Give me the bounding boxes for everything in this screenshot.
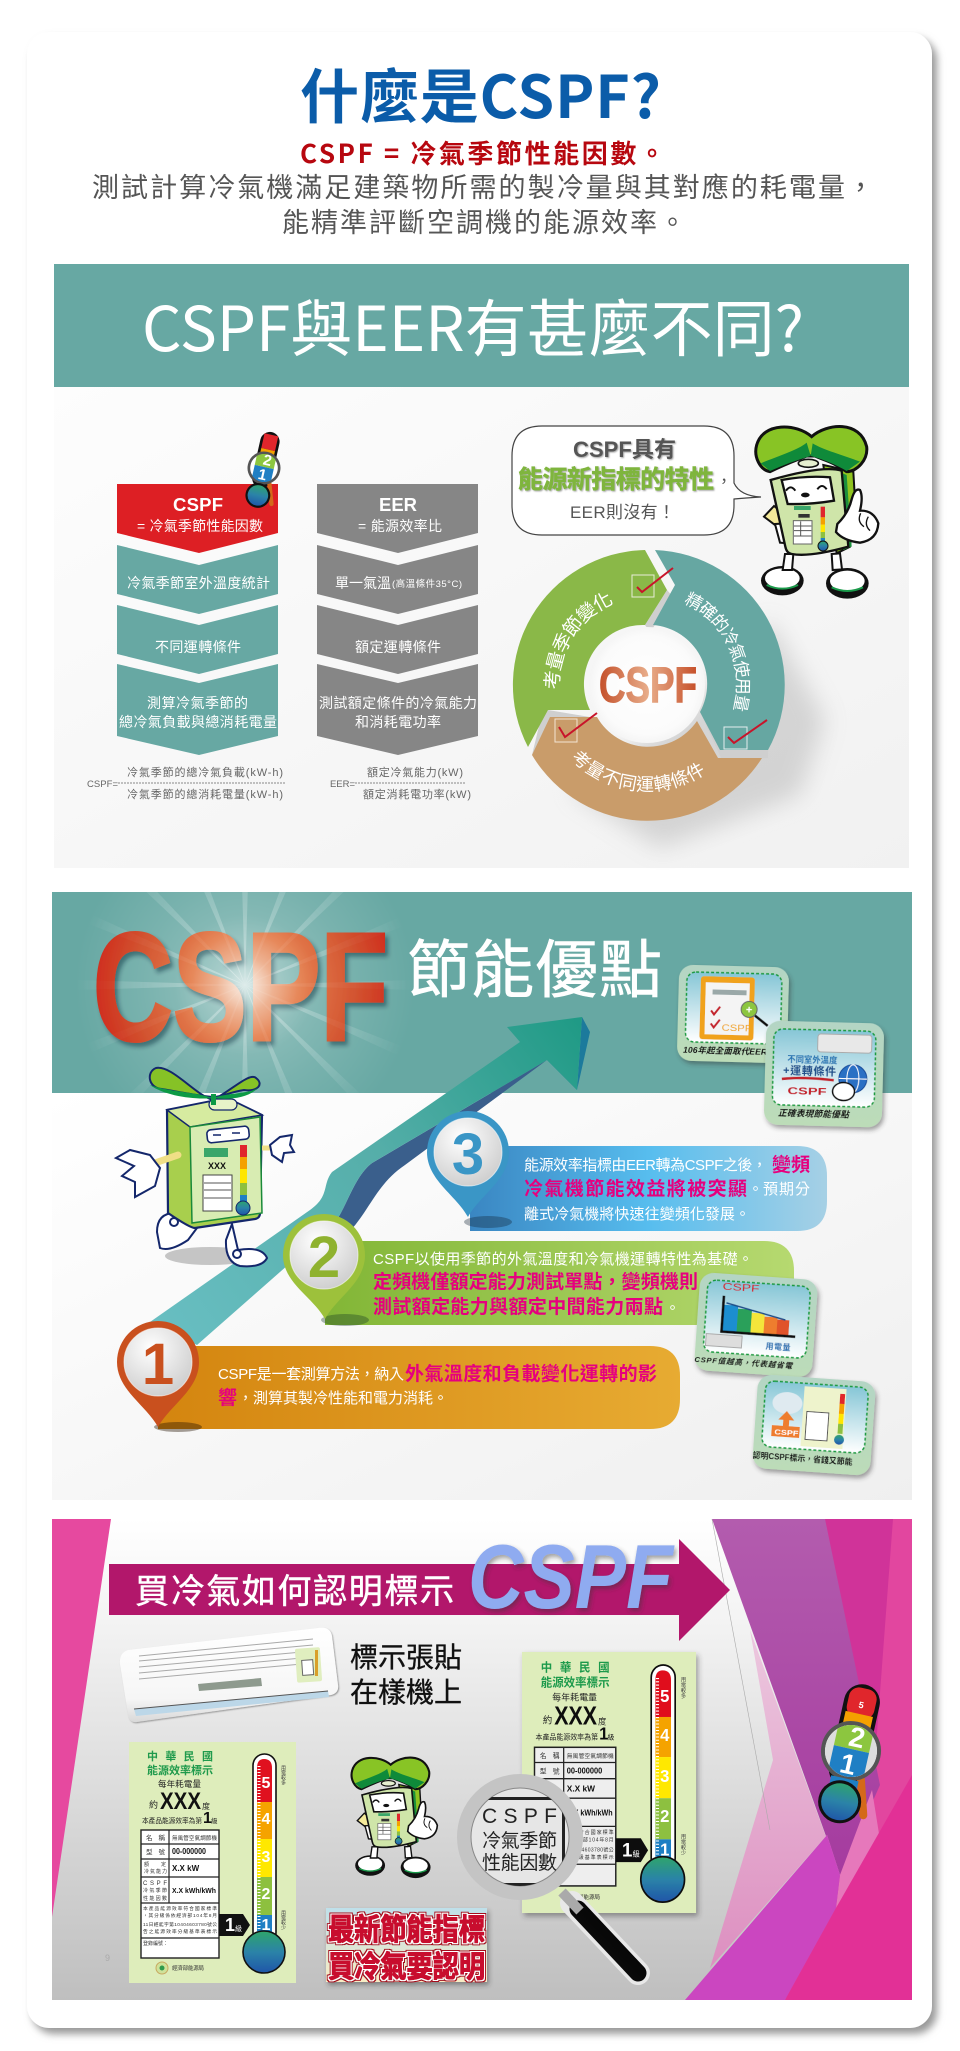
center disc <box>589 627 705 743</box>
pin 3 <box>427 1111 512 1228</box>
description text: 測試計算冷氣機滿足建築物所需的製冷量與其對應的耗電量， <box>92 166 874 205</box>
mascot: propeller leaves: XXX <box>208 1161 226 1171</box>
EER chevron text: 單一氣溫 <box>335 575 391 591</box>
energy label: left: 告之能源效率分級基準表標示 <box>143 1928 217 1935</box>
bar 1: ，測算其製冷性能和電力消耗。 <box>238 1390 448 1407</box>
panel background <box>52 1093 912 1500</box>
bar 2: CSPF以使用季節的外氣溫度和冷氣機運轉特性為基礎。 <box>373 1250 753 1268</box>
badge: higher CSPF saves power <box>694 1272 818 1378</box>
EER formula: EER= <box>330 779 355 790</box>
EER chevron text <box>319 494 477 730</box>
energy label: left <box>129 1742 296 1983</box>
green segment <box>513 550 667 747</box>
badge: recognise CSPF label <box>752 1374 876 1476</box>
energy label: left: 用電較多 <box>280 1765 286 1786</box>
energy label: right: 用電較少 <box>680 1834 686 1856</box>
speech bubble <box>512 426 761 535</box>
bar 1: 響 <box>218 1386 237 1409</box>
badge: accurate energy saving: 正確表現節能優點 <box>778 1108 850 1120</box>
energy label: left: 1 <box>203 1810 212 1827</box>
energy label: left: 級 <box>211 1816 218 1825</box>
bar 3 <box>470 1146 827 1231</box>
bar 1: CSPF是一套測算方法，納入 <box>218 1366 404 1383</box>
energy label: right: 每年耗電量 <box>552 1692 597 1703</box>
energy label: right: 級 <box>632 1849 640 1859</box>
energy label: left: 5 <box>262 1775 271 1792</box>
icon: thermometer with magnifier: 1 <box>256 466 268 484</box>
badge: replaces EER <box>677 965 789 1063</box>
energy label: left: 經濟部能源局 <box>172 1964 204 1972</box>
energy label: left: 用電較少 <box>280 1910 286 1930</box>
EER chevron text: EER <box>379 494 417 515</box>
donut shadow <box>570 620 825 848</box>
banner title: 買冷氣如何認明標示 <box>135 1573 454 1611</box>
badge: replaces EER: CSPF <box>722 1023 752 1034</box>
energy label: left: 無風管空氣調節機 <box>172 1834 217 1842</box>
tan ring text: 考量不同運轉條件 <box>574 750 704 792</box>
magnifier: 性能因數 <box>482 1852 557 1874</box>
donut diagram <box>512 550 829 852</box>
CSPF chevron text: 測算冷氣季節的 <box>147 695 248 711</box>
energy label: right: 約 <box>543 1714 552 1727</box>
bar 3: 。 <box>748 1181 763 1198</box>
energy label: left: 2 <box>262 1886 271 1903</box>
CSPF formula <box>87 765 286 801</box>
energy label: right: 用電較多 <box>680 1677 686 1700</box>
sticker caption: 標示張貼 <box>350 1642 462 1673</box>
handle <box>572 1903 638 1973</box>
air conditioner <box>120 1628 338 1722</box>
energy label: left: 登錄編號： <box>143 1940 168 1947</box>
left pink shape <box>52 1519 111 1917</box>
energy label: right: 中 華 民 國 <box>541 1660 610 1675</box>
heading band <box>54 264 909 387</box>
bar 2 <box>325 1241 794 1325</box>
energy label: left: 本產品能源效率為第 <box>142 1816 202 1825</box>
sticker caption <box>350 1642 462 1708</box>
bar 1 <box>158 1346 680 1429</box>
energy label: left: 名 稱 <box>146 1833 166 1842</box>
badge: accurate energy saving: 不同室外溫度 <box>787 1054 838 1065</box>
energy label: left: 度 <box>202 1801 210 1811</box>
lens text: CSPF <box>482 1805 557 1828</box>
energy label: left: 冷氣季節 <box>143 1887 167 1894</box>
energy label: left: 性能因數 <box>143 1895 167 1902</box>
energy label: right: 3 <box>660 1767 669 1786</box>
slogan plate: 最新節能指標 <box>328 1914 485 1947</box>
icon: large thermometer with magnifier: 5 <box>858 1700 865 1711</box>
right decorative facets <box>685 1519 912 2000</box>
EER chevrons <box>317 484 478 755</box>
mascot: propeller leaves <box>116 1068 294 1266</box>
bar 3: 離式冷氣機將快速往變頻化發展。 <box>524 1205 750 1223</box>
CSPF chevron text: 不同運轉條件 <box>155 639 241 655</box>
bar 1: 外氣溫度和負載變化運轉的影 <box>405 1362 657 1385</box>
sunburst <box>90 892 400 1093</box>
CSPF chevron text: CSPF <box>173 494 223 515</box>
speech bubble: EER則沒有！ <box>570 503 675 522</box>
center CSPF: CSPF <box>599 657 697 713</box>
EER chevron text: 額定運轉條件 <box>355 639 441 655</box>
energy label: right: 1 <box>660 1840 669 1860</box>
heading: CSPF與EER有甚麼不同? <box>142 279 804 369</box>
badge: replaces EER: + <box>746 1004 752 1017</box>
badge: recognise CSPF label: 認明CSPF標示，省錢又節能 <box>752 1450 853 1467</box>
energy label: right: 型 號 <box>540 1766 560 1775</box>
energy label: left: 級 <box>235 1924 242 1933</box>
icon: large thermometer with magnifier: 1 <box>837 1747 859 1781</box>
badge: accurate energy saving <box>764 1020 884 1128</box>
icon: thermometer with magnifier <box>245 432 280 508</box>
energy label: left: 能源效率標示 <box>147 1763 213 1777</box>
badge: higher CSPF saves power: CSPF <box>722 1282 760 1295</box>
EER formula <box>330 765 471 801</box>
teal band <box>52 892 912 1093</box>
CSPF italic title: CSPF <box>468 1527 675 1628</box>
tan segment <box>532 717 762 821</box>
CSPF chevron text: 冷氣季節室外溫度統計 <box>127 575 270 591</box>
energy label: right: 2 <box>660 1807 669 1826</box>
EER column <box>317 484 478 755</box>
badge: recognise CSPF label: CSPF <box>774 1427 799 1438</box>
energy label: right: 名 稱 <box>540 1751 560 1760</box>
energy label: left: 中 華 民 國 <box>147 1749 213 1763</box>
speech bubble: 能源新指標的特性 <box>518 466 714 494</box>
energy label: right: 度 <box>598 1716 607 1727</box>
EER chevron text: = 能源效率比 <box>358 518 442 534</box>
badge: accurate energy saving: CSPF <box>787 1086 827 1098</box>
energy label: right: 告之能源效率分級基準表標示 <box>537 1854 614 1861</box>
panel: how to identify the label <box>52 1519 912 2000</box>
panel background <box>54 387 909 868</box>
pin 1 <box>117 1321 202 1432</box>
green ring text: 考量季節變化 <box>543 593 612 689</box>
CSPF chevron text: = 冷氣季節性能因數 <box>137 518 263 534</box>
speech bubble: ， <box>716 474 732 491</box>
energy label: left: 型 號 <box>146 1847 166 1856</box>
energy label: left: 本產品能源效率符合國家標準 <box>143 1905 217 1912</box>
badge: accurate energy saving: +運轉條件 <box>783 1063 836 1078</box>
mascot: small thumbs up <box>352 1758 437 1878</box>
slogan plate: 買冷氣要認明 <box>328 1951 485 1984</box>
CSPF chevron text: 總冷氣負載與總消耗電量 <box>119 714 277 730</box>
energy label: left: 每年耗電量 <box>158 1779 201 1789</box>
panel background <box>52 1519 912 2000</box>
EER formula: 額定消耗電功率(kW) <box>363 787 471 801</box>
CSPF column <box>117 484 278 755</box>
main title: 什麼是CSPF? <box>300 50 661 135</box>
sun glow <box>175 915 315 1055</box>
energy label: left: X.X kWh/kWh <box>172 1886 216 1895</box>
panel: CSPF vs EER <box>54 264 909 868</box>
bar 2: 定頻機僅額定能力測試單點，變頻機則 <box>373 1270 698 1293</box>
bar 2: 。 <box>665 1300 680 1317</box>
bar 2: 測試額定能力與額定中間能力兩點 <box>373 1295 663 1318</box>
energy label: left: 3 <box>262 1849 271 1866</box>
energy label: right: 經濟部能源局 <box>567 1893 600 1901</box>
magnifier <box>464 1781 638 1973</box>
lens <box>464 1781 576 1893</box>
CSPF chevron text <box>119 494 277 730</box>
banner arrow <box>109 1539 730 1641</box>
teal segment <box>653 550 785 750</box>
pin 3: 3 <box>452 1122 484 1187</box>
pin 2 <box>283 1214 369 1326</box>
energy label: left: 11日經能字第10404603780號公 <box>143 1921 217 1928</box>
energy label: right <box>522 1652 696 1913</box>
CSPF formula: 冷氣季節的總消耗電量(kW-h) <box>127 787 283 801</box>
bar 3: 預期分 <box>763 1181 810 1198</box>
teal ring text: 精確的冷氣使用量 <box>684 592 750 712</box>
energy label: left: X.X kW <box>172 1864 200 1873</box>
energy label: right: 5 <box>660 1687 669 1706</box>
EER chevron text: 和消耗電功率 <box>355 714 441 730</box>
energy label: left: 約 <box>149 1799 158 1810</box>
energy label: right: 1 <box>622 1840 633 1862</box>
energy label: right: 無風管空氣調節機 <box>567 1752 614 1760</box>
badge: higher CSPF saves power: CSPF值越高，代表越省電 <box>694 1355 794 1371</box>
energy label: left: 1 <box>262 1917 271 1934</box>
description text <box>92 166 874 240</box>
EER formula: 額定冷氣能力(kW) <box>367 765 463 779</box>
pin 1: 1 <box>142 1332 174 1397</box>
bar 3: 變頻 <box>772 1153 810 1176</box>
energy label: left: 冷氣能力 <box>144 1868 167 1875</box>
energy label: left: 00-000000 <box>172 1847 206 1856</box>
energy label: right: 本產品能源效率為第 <box>536 1733 598 1742</box>
energy label: right: 1 <box>599 1724 608 1744</box>
CSPF chevrons <box>117 545 278 755</box>
energy label: right: 能源效率標示 <box>541 1675 610 1690</box>
icon: thermometer with magnifier: 2 <box>261 452 273 470</box>
energy label: left: 4 <box>262 1811 271 1828</box>
icon: large thermometer with magnifier: 2 <box>846 1721 868 1754</box>
energy label: right: ，其分級係依經濟部104年8月 <box>537 1836 614 1844</box>
check marks <box>555 568 767 749</box>
mascot: thumbs up <box>756 427 878 599</box>
energy label: left: CSPF <box>143 1881 167 1887</box>
CSPF formula: 冷氣季節的總冷氣負載(kW-h) <box>127 765 283 779</box>
EER chevron text: 測試額定條件的冷氣能力 <box>319 695 477 711</box>
CSPF formula: CSPF= <box>87 779 118 790</box>
energy label: right: 00-000000 <box>567 1765 602 1775</box>
energy label: left: 1 <box>225 1915 235 1935</box>
energy label: left: 額 定 <box>144 1861 166 1868</box>
energy label: left: XXX <box>160 1788 201 1815</box>
bar 3: 冷氣機節能效益將被突顯 <box>524 1177 747 1200</box>
description text: 能精準評斷空調機的能源效率。 <box>282 201 686 240</box>
bar 3: 能源效率指標由EER轉為CSPF之後， <box>524 1157 767 1174</box>
red subtitle: CSPF = 冷氣季節性能因數。 <box>300 134 665 171</box>
panel: CSPF advantages <box>52 892 912 1500</box>
magnifier: 冷氣季節 <box>482 1830 557 1852</box>
energy label: right: XXX <box>554 1702 597 1731</box>
CSPF header chevron <box>117 484 278 553</box>
energy label: right: 本產品能源效率符合國家標準 <box>537 1829 614 1836</box>
heading: 節能優點 <box>407 920 662 1011</box>
big arrow <box>150 1017 590 1345</box>
speech bubble: CSPF具有 <box>573 437 676 462</box>
energy label: right: 11日經能字第10404603780號公 <box>537 1846 614 1853</box>
pin 2: 2 <box>308 1225 340 1290</box>
energy label: left: ，其分級係依經濟部104年8月 <box>143 1912 217 1919</box>
badge: replaces EER: 106年起全面取代EER <box>683 1045 768 1057</box>
energy label: right: 4 <box>660 1726 670 1745</box>
icon: large thermometer with magnifier <box>818 1684 882 1824</box>
page number: 9 <box>105 1953 110 1963</box>
energy label: right: 級 <box>607 1733 614 1742</box>
energy label: right: X.X kW <box>567 1784 596 1794</box>
energy label: right: X.X kWh/kWh <box>567 1808 613 1818</box>
sunburst highlight over title <box>160 932 336 1046</box>
badge: higher CSPF saves power: 用電量 <box>765 1342 791 1352</box>
EER chevron text: (高溫條件35°C) <box>392 578 462 590</box>
sticker caption: 在樣機上 <box>350 1677 462 1708</box>
CSPF big title: CSPF <box>93 901 388 1073</box>
slogan plate <box>326 1908 487 1984</box>
segment gaps <box>532 590 768 760</box>
